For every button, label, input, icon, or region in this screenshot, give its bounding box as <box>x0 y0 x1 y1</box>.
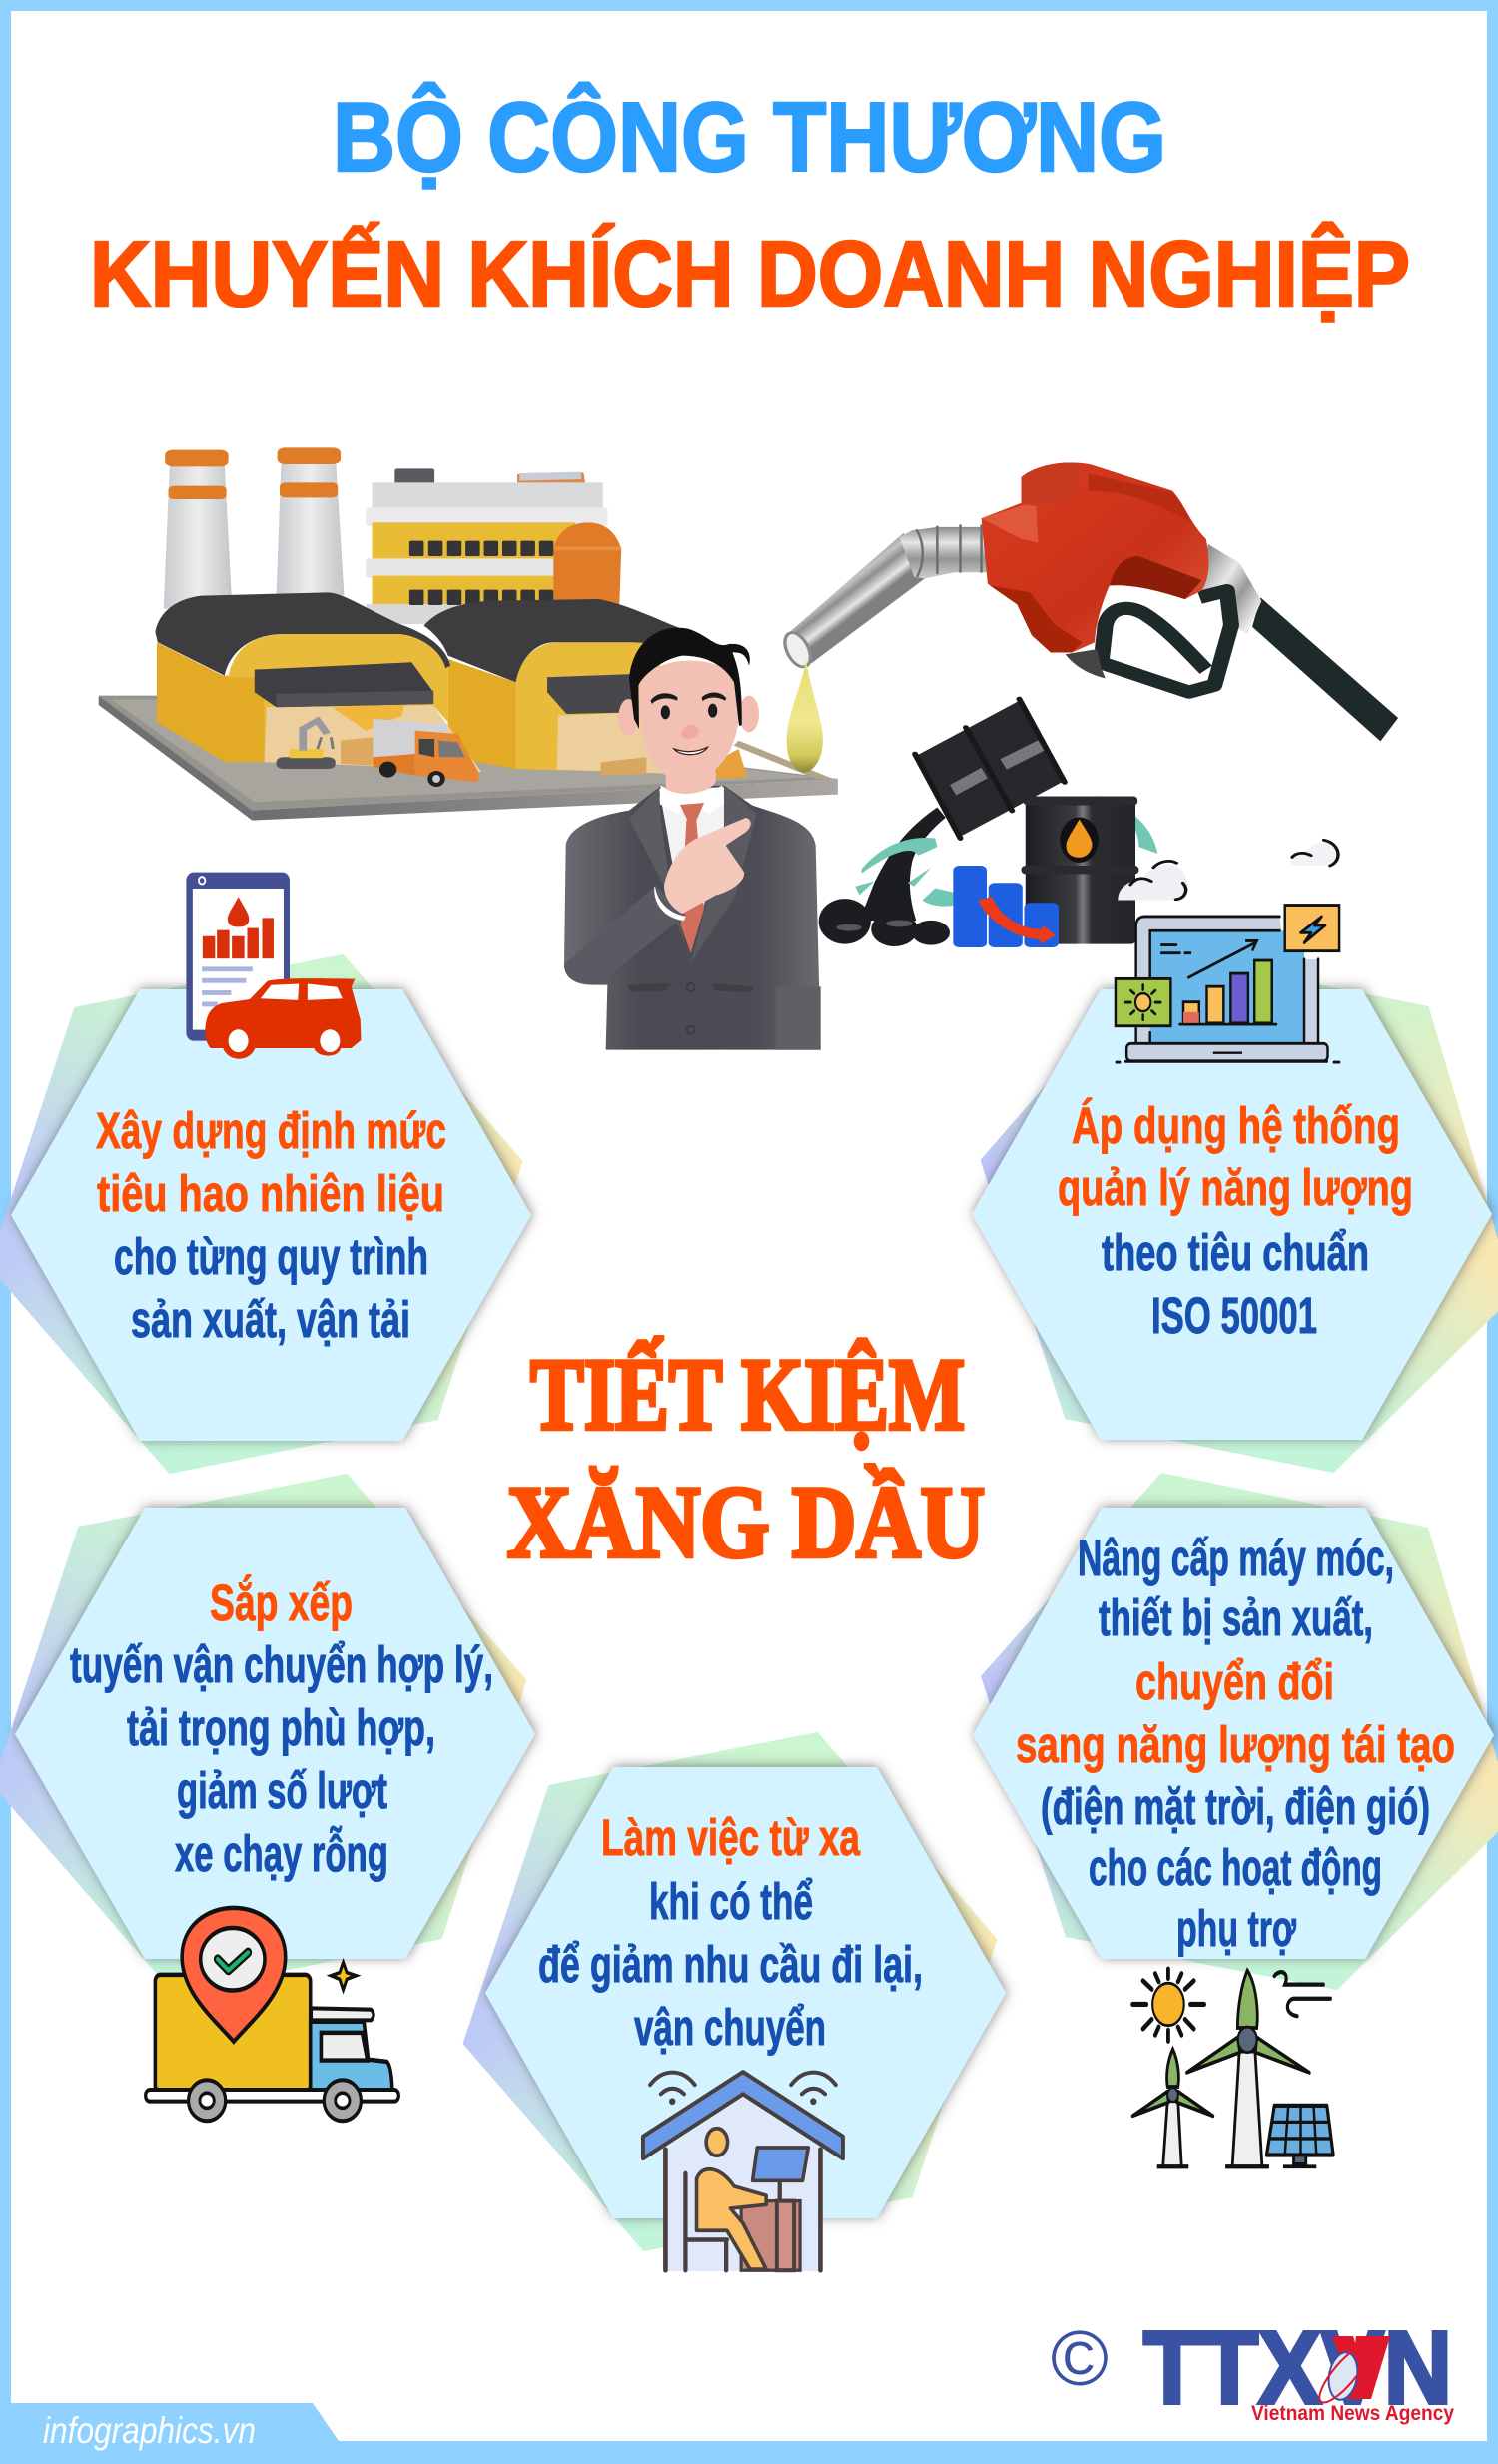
icon: wind turbines, sun and solar panel <box>1132 1969 1333 2166</box>
panel text: khi có thể <box>649 1873 813 1930</box>
panel backdrop <box>0 954 523 1474</box>
panel text: tiêu hao nhiên liệu <box>97 1165 444 1222</box>
panel: remote working <box>463 1732 1006 2271</box>
panel backdrop <box>0 1474 527 1993</box>
icon: person working from home <box>643 2072 843 2271</box>
panel text: chuyển đổi <box>1135 1653 1334 1710</box>
handle <box>1202 544 1261 634</box>
panel text: vận chuyển <box>634 1999 826 2056</box>
icon: delivery truck with location pin <box>146 1908 398 2121</box>
oil drop <box>787 660 823 772</box>
panel text: giảm số lượt <box>177 1762 387 1819</box>
hexagon <box>973 1508 1494 1959</box>
eyes and brows <box>651 692 726 719</box>
panel text <box>1016 1530 1455 1957</box>
illustration: businessman pointing <box>564 628 821 1050</box>
panel text: sản xuất, vận tải <box>131 1291 410 1348</box>
panel text <box>96 1102 446 1348</box>
panel backdrop <box>463 1732 997 2251</box>
panel text <box>1058 1097 1413 1344</box>
suit <box>564 786 821 1050</box>
robot arm <box>277 721 336 769</box>
teal splashes <box>855 795 1157 907</box>
hexagon <box>972 989 1492 1440</box>
panel text: theo tiêu chuẩn <box>1102 1224 1369 1281</box>
panel text <box>70 1573 493 1882</box>
hexagon <box>11 989 531 1441</box>
pockets and buttons <box>627 983 821 1050</box>
panel text: để giảm nhu cầu đi lại, <box>538 1936 923 1993</box>
hexagon <box>485 1767 1006 2218</box>
illustration: factory <box>99 447 838 821</box>
shirt <box>659 787 724 912</box>
panel text: Xây dựng định mức <box>96 1102 446 1159</box>
truck <box>374 719 479 787</box>
hand <box>664 818 751 914</box>
panel text: ISO 50001 <box>1151 1287 1317 1344</box>
panel text: cho từng quy trình <box>114 1228 428 1285</box>
silver pipe <box>786 533 925 664</box>
panel: transport routes <box>0 1474 535 2121</box>
footer tab: infographics.vn: infographics.vn <box>43 2410 256 2451</box>
panel text: thiết bị sản xuất, <box>1099 1589 1373 1646</box>
tie <box>680 803 704 953</box>
panel text: tải trọng phù hợp, <box>127 1699 435 1756</box>
footer tab: infographics.vn <box>0 2403 339 2464</box>
sleeve <box>564 886 686 984</box>
ears <box>618 699 638 736</box>
smile <box>674 747 707 755</box>
panel text: tuyến vận chuyển hợp lý, <box>70 1636 493 1693</box>
heading line 1: TIẾT KIỆM <box>530 1336 965 1452</box>
hose <box>1252 597 1398 741</box>
illustration: fuel nozzle with drop <box>780 463 1398 772</box>
title line 1: BỘ CÔNG THƯƠNG <box>333 82 1166 192</box>
logo: TTXVN Vietnam News Agency: TTXVN <box>1143 2310 1452 2425</box>
panel: energy management system <box>972 906 1498 1473</box>
logo: copyright symbol: © <box>1051 2314 1109 2402</box>
red arrow <box>978 897 1056 944</box>
panel text: phụ trợ <box>1176 1900 1296 1957</box>
title <box>90 82 1410 325</box>
tilted barrel <box>915 699 1065 839</box>
heading: tiet kiem xang dau <box>507 1336 985 1579</box>
red body <box>982 463 1209 653</box>
cuff <box>654 887 686 921</box>
panel backdrop <box>981 953 1498 1473</box>
neck and face <box>639 661 740 794</box>
clouds <box>1118 840 1339 900</box>
hall 1 <box>157 642 264 762</box>
lapels <box>629 787 691 961</box>
standing barrel <box>1026 797 1135 944</box>
icon: laptop with energy chart <box>1116 906 1339 1062</box>
panel text: Áp dụng hệ thống <box>1072 1097 1400 1154</box>
panel: fuel consumption norms <box>0 873 531 1474</box>
panel backdrop <box>981 1473 1498 1990</box>
hair <box>629 628 750 729</box>
oil pour <box>859 808 946 921</box>
hexagon <box>15 1508 535 1959</box>
logo: TTXVN Vietnam News Agency: Vietnam News Agency <box>1251 2402 1454 2425</box>
illustration: oil barrels with falling chart <box>819 699 1339 947</box>
panel text: xe chạy rỗng <box>175 1825 388 1882</box>
collar <box>659 786 724 814</box>
panel text: Sắp xếp <box>210 1573 353 1631</box>
nose <box>681 725 699 739</box>
blue falling bars <box>953 866 1059 947</box>
panel text <box>538 1809 923 2056</box>
heading line 2: XĂNG DẦU <box>507 1464 985 1579</box>
icon: tablet and car <box>186 873 361 1059</box>
panel: upgrade and renewable energy <box>973 1473 1498 2166</box>
hall 2 <box>516 642 700 774</box>
panel text: Làm việc từ xa <box>601 1809 860 1866</box>
